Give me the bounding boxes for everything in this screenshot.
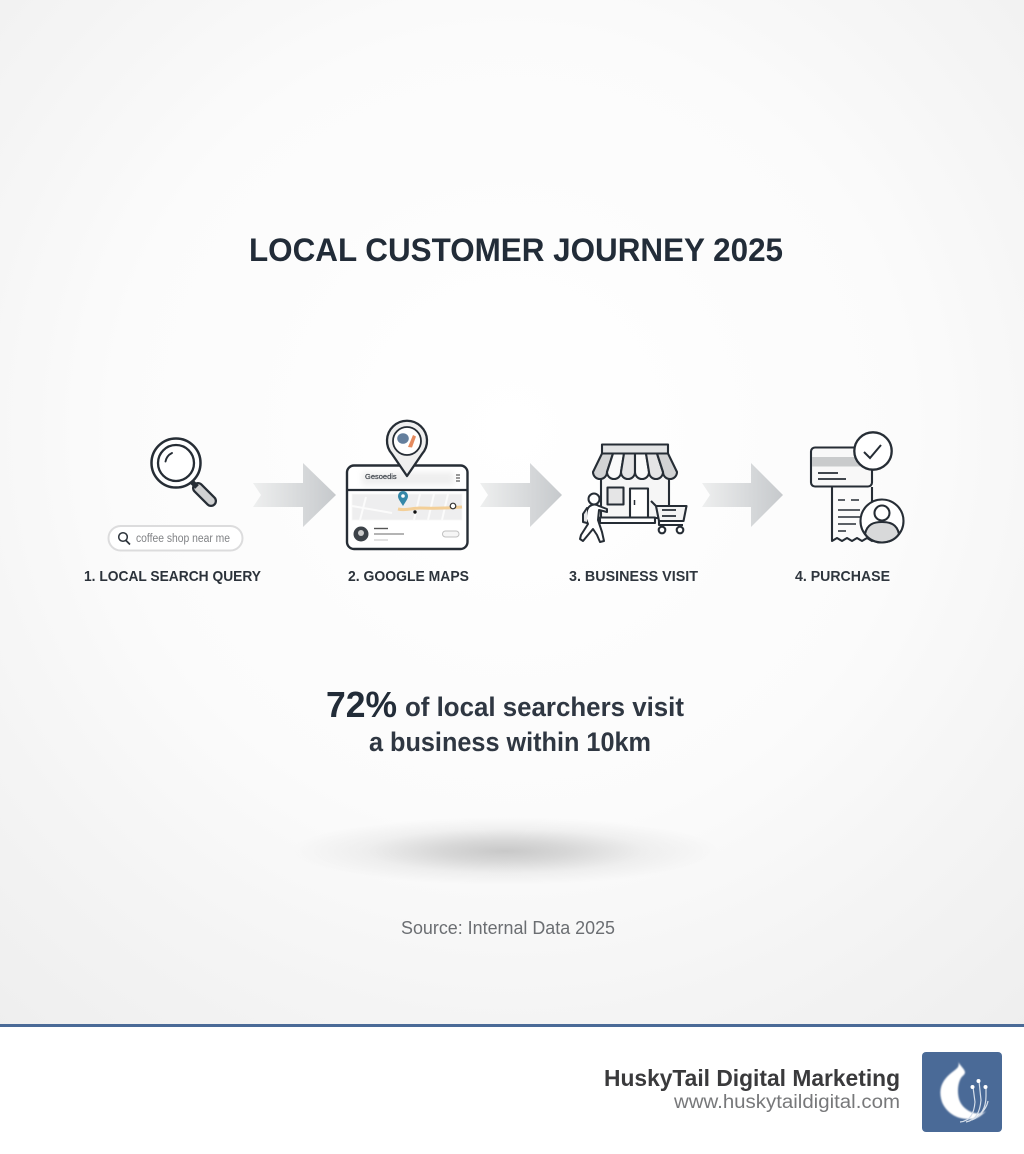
icon: customer circle xyxy=(860,500,904,542)
icon: magnifying glass xyxy=(152,438,211,501)
step 4: purchase xyxy=(795,432,904,585)
step 1: local search query xyxy=(84,438,261,585)
arrow 3 xyxy=(702,463,783,527)
step 2: google maps xyxy=(347,421,469,585)
icon: walking person xyxy=(580,494,607,542)
icon: credit card xyxy=(811,448,872,486)
decorative shadow xyxy=(290,817,720,885)
footer xyxy=(0,1024,1024,1154)
company name: HuskyTail Digital Marketing xyxy=(604,1065,900,1091)
cart xyxy=(651,501,686,521)
label: step 1: 1. LOCAL SEARCH QUERY xyxy=(84,568,261,585)
icon: receipt xyxy=(832,487,872,541)
arrow 2 xyxy=(480,463,562,527)
icon: check circle xyxy=(854,432,892,470)
logo xyxy=(922,1052,1002,1132)
statistic callout xyxy=(326,684,684,757)
label: step 4: 4. PURCHASE xyxy=(795,568,890,585)
statistic callout: of local searchers visit xyxy=(405,692,684,722)
icon: map card: Gesoedis xyxy=(365,472,397,481)
title: LOCAL CUSTOMER JOURNEY 2025 xyxy=(249,232,783,268)
source note: Source: Internal Data 2025 xyxy=(401,918,615,938)
icon: location pin xyxy=(387,421,427,476)
search bar: coffee shop near me xyxy=(136,533,230,545)
icon: storefront xyxy=(593,444,686,533)
step 3: business visit xyxy=(569,444,698,585)
arrow 1 xyxy=(253,463,336,527)
website: www.huskytaildigital.com xyxy=(673,1092,900,1113)
label: step 3: 3. BUSINESS VISIT xyxy=(569,568,698,585)
statistic callout: a business within 10km xyxy=(369,727,651,757)
label: step 2: 2. GOOGLE MAPS xyxy=(348,568,469,585)
search bar xyxy=(108,526,242,550)
statistic callout: 72% xyxy=(326,684,397,725)
icon: map card xyxy=(347,466,468,549)
